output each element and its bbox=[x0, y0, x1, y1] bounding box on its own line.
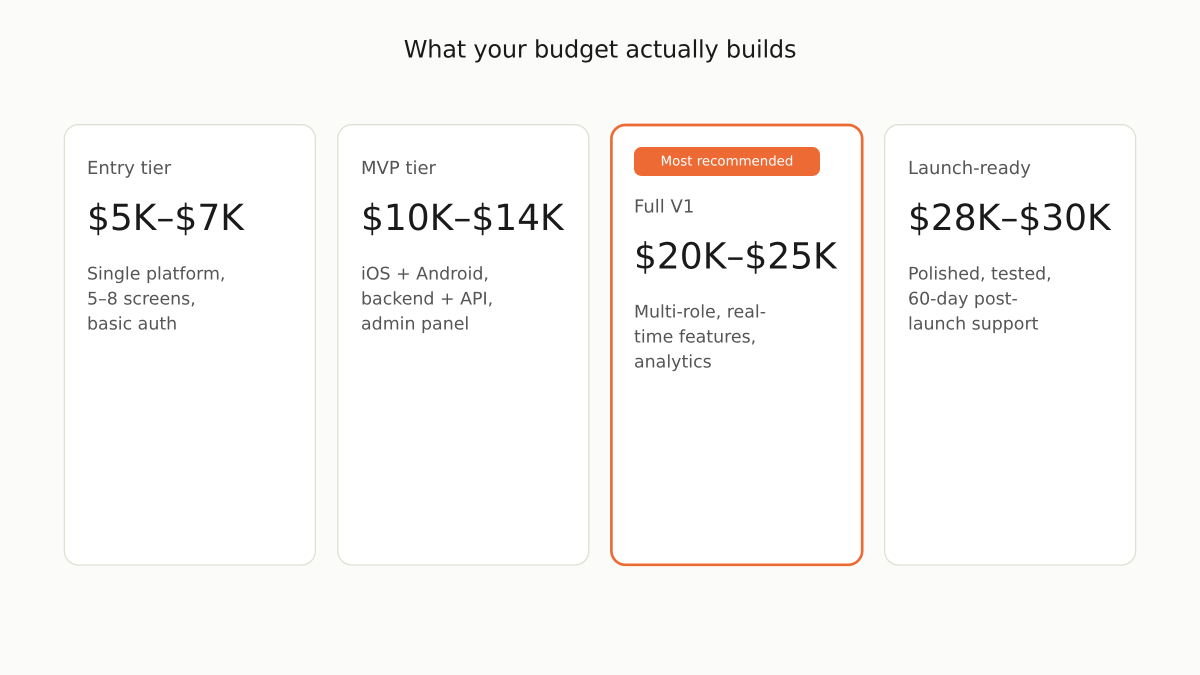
badge: most recommended: Most recommended bbox=[661, 154, 793, 170]
panel: launch-ready card bbox=[885, 125, 1136, 565]
entry tier price: $5K–$7K bbox=[87, 198, 245, 239]
MVP tier description: admin panel bbox=[361, 315, 469, 335]
entry tier label: Entry tier bbox=[87, 158, 172, 179]
entry tier description: basic auth bbox=[87, 315, 177, 335]
entry tier card background bbox=[64, 125, 315, 565]
MVP tier label: MVP tier bbox=[361, 158, 437, 179]
panel: Full V1 card (highlighted) bbox=[611, 125, 862, 565]
MVP tier price: $10K–$14K bbox=[361, 198, 565, 239]
MVP tier card background bbox=[338, 125, 589, 565]
MVP tier description: backend + API, bbox=[361, 290, 493, 310]
panel: entry tier card bbox=[64, 125, 315, 565]
Full V1 price: $20K–$25K bbox=[634, 237, 838, 278]
Full V1 label: Full V1 bbox=[634, 197, 694, 218]
title: What your budget actually builds bbox=[404, 36, 796, 64]
Full V1 description: analytics bbox=[634, 353, 712, 373]
launch-ready label: Launch-ready bbox=[908, 158, 1031, 179]
launch-ready description: Polished, tested, bbox=[908, 265, 1052, 285]
launch-ready price: $28K–$30K bbox=[908, 198, 1112, 239]
launch-ready description: 60-day post- bbox=[908, 290, 1018, 310]
MVP tier description: iOS + Android, bbox=[361, 265, 489, 285]
launch-ready card background bbox=[885, 125, 1136, 565]
launch-ready description: launch support bbox=[908, 315, 1039, 335]
panel: MVP tier card bbox=[338, 125, 589, 565]
Full V1 description: time features, bbox=[634, 328, 756, 348]
badge: most recommended bbox=[634, 147, 820, 176]
entry tier description: Single platform, bbox=[87, 265, 225, 285]
Full V1 description: Multi-role, real- bbox=[634, 303, 766, 323]
entry tier description: 5–8 screens, bbox=[87, 290, 196, 310]
Full V1 card background bbox=[611, 125, 862, 565]
